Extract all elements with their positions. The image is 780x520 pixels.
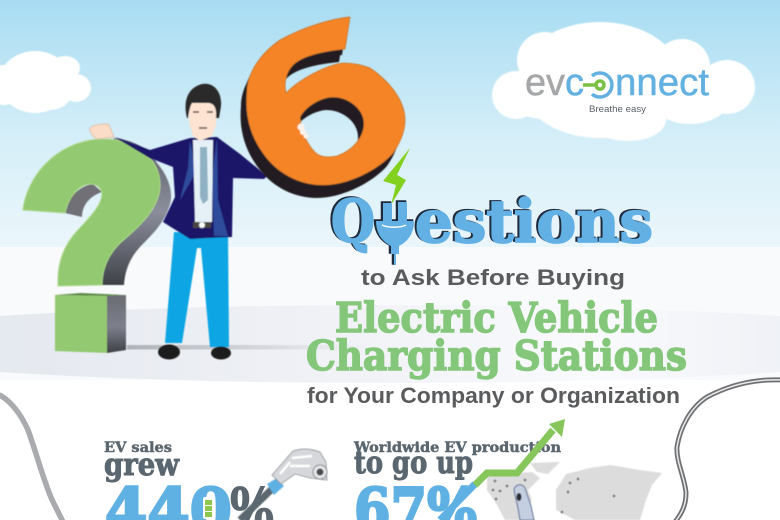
green growth arrow bbox=[475, 419, 565, 485]
icon: plug replacing letter u bbox=[374, 201, 414, 265]
cloud: left bbox=[0, 51, 91, 113]
man tie bbox=[200, 147, 208, 204]
world map bbox=[487, 462, 662, 520]
map north america bbox=[487, 472, 540, 520]
Questions shadow estions: estions bbox=[413, 186, 651, 255]
subheading: for Your Company or Organization: for Your Company or Organization bbox=[307, 383, 680, 408]
man left hand bbox=[90, 124, 114, 139]
stat: EV sales grew 440% bbox=[104, 440, 327, 520]
icon: charging connector bbox=[240, 449, 327, 520]
stat: worldwide EV production to go up 67% bbox=[353, 419, 565, 520]
map greenland bbox=[530, 462, 560, 474]
connector collar bbox=[267, 478, 284, 495]
question mark dot top bbox=[55, 293, 126, 296]
logo: evconnect bbox=[525, 62, 709, 115]
logo power ring bbox=[583, 73, 612, 97]
connector body bbox=[272, 449, 327, 484]
Questions estions: estions bbox=[415, 187, 653, 256]
Questions shadow Q: Q bbox=[329, 186, 373, 255]
icon: battery in zero bbox=[203, 497, 214, 519]
subheading: to Ask Before Buying: to Ask Before Buying bbox=[361, 265, 625, 290]
man jacket bbox=[115, 137, 267, 239]
question mark side bbox=[100, 138, 171, 285]
cable: right double line bbox=[675, 380, 780, 520]
icon: map charger plug bbox=[514, 485, 534, 520]
stat label grew: grew bbox=[104, 447, 180, 483]
background: sky bbox=[0, 0, 780, 247]
background: horizon band bbox=[0, 247, 780, 380]
Questions Q: Q bbox=[331, 187, 375, 256]
man lapel highlights bbox=[180, 138, 228, 236]
big orange number six bbox=[241, 17, 405, 198]
map eurasia and africa bbox=[556, 465, 662, 520]
blue trend line bbox=[440, 484, 475, 520]
man shoe left bbox=[158, 344, 180, 360]
man belt bbox=[193, 222, 211, 228]
icon: lightning bolt bbox=[383, 148, 410, 205]
ground shadow bbox=[127, 345, 367, 350]
cloud: logo backdrop bbox=[492, 22, 755, 141]
connector socket core bbox=[316, 468, 324, 476]
man neck and face bbox=[188, 102, 217, 141]
heading: Electric Vehicle: Electric Vehicle bbox=[335, 294, 658, 342]
connector socket bbox=[313, 465, 327, 479]
connector cable bbox=[240, 487, 274, 520]
logo tagline: Breathe easy bbox=[589, 104, 646, 115]
question mark icon bbox=[23, 138, 171, 353]
plug socket bbox=[516, 493, 522, 501]
man fingers on six bbox=[298, 124, 308, 138]
stat label EV sales: EV sales bbox=[104, 440, 172, 456]
man hair bbox=[186, 84, 221, 118]
stat label worldwide: Worldwide EV production bbox=[353, 440, 561, 456]
question mark dot side bbox=[107, 295, 126, 353]
man shoe right bbox=[211, 346, 231, 360]
background: ground ellipse bbox=[0, 305, 780, 383]
question mark dot face bbox=[55, 295, 107, 353]
question mark face bbox=[23, 139, 160, 286]
six extrusion bbox=[241, 23, 402, 198]
connector highlights bbox=[280, 456, 312, 474]
man eyes and mouth bbox=[193, 112, 213, 128]
figure: businessman bbox=[90, 84, 267, 359]
logo wordmark c: c bbox=[565, 62, 584, 104]
six face bbox=[247, 17, 405, 185]
question mark hook underside bbox=[65, 184, 102, 217]
logo wordmark nnect: nnect bbox=[615, 62, 709, 104]
man buckle bbox=[199, 222, 205, 228]
man trousers bbox=[165, 232, 229, 347]
logo wordmark ev: ev bbox=[525, 62, 565, 104]
heading: Charging Stations: Charging Stations bbox=[306, 332, 687, 380]
cable: left grey bbox=[0, 394, 63, 520]
stat label to go up: to go up bbox=[354, 445, 473, 481]
heading: Questions bbox=[329, 186, 653, 265]
man shirt bbox=[193, 140, 213, 222]
map city dots bbox=[492, 478, 616, 514]
